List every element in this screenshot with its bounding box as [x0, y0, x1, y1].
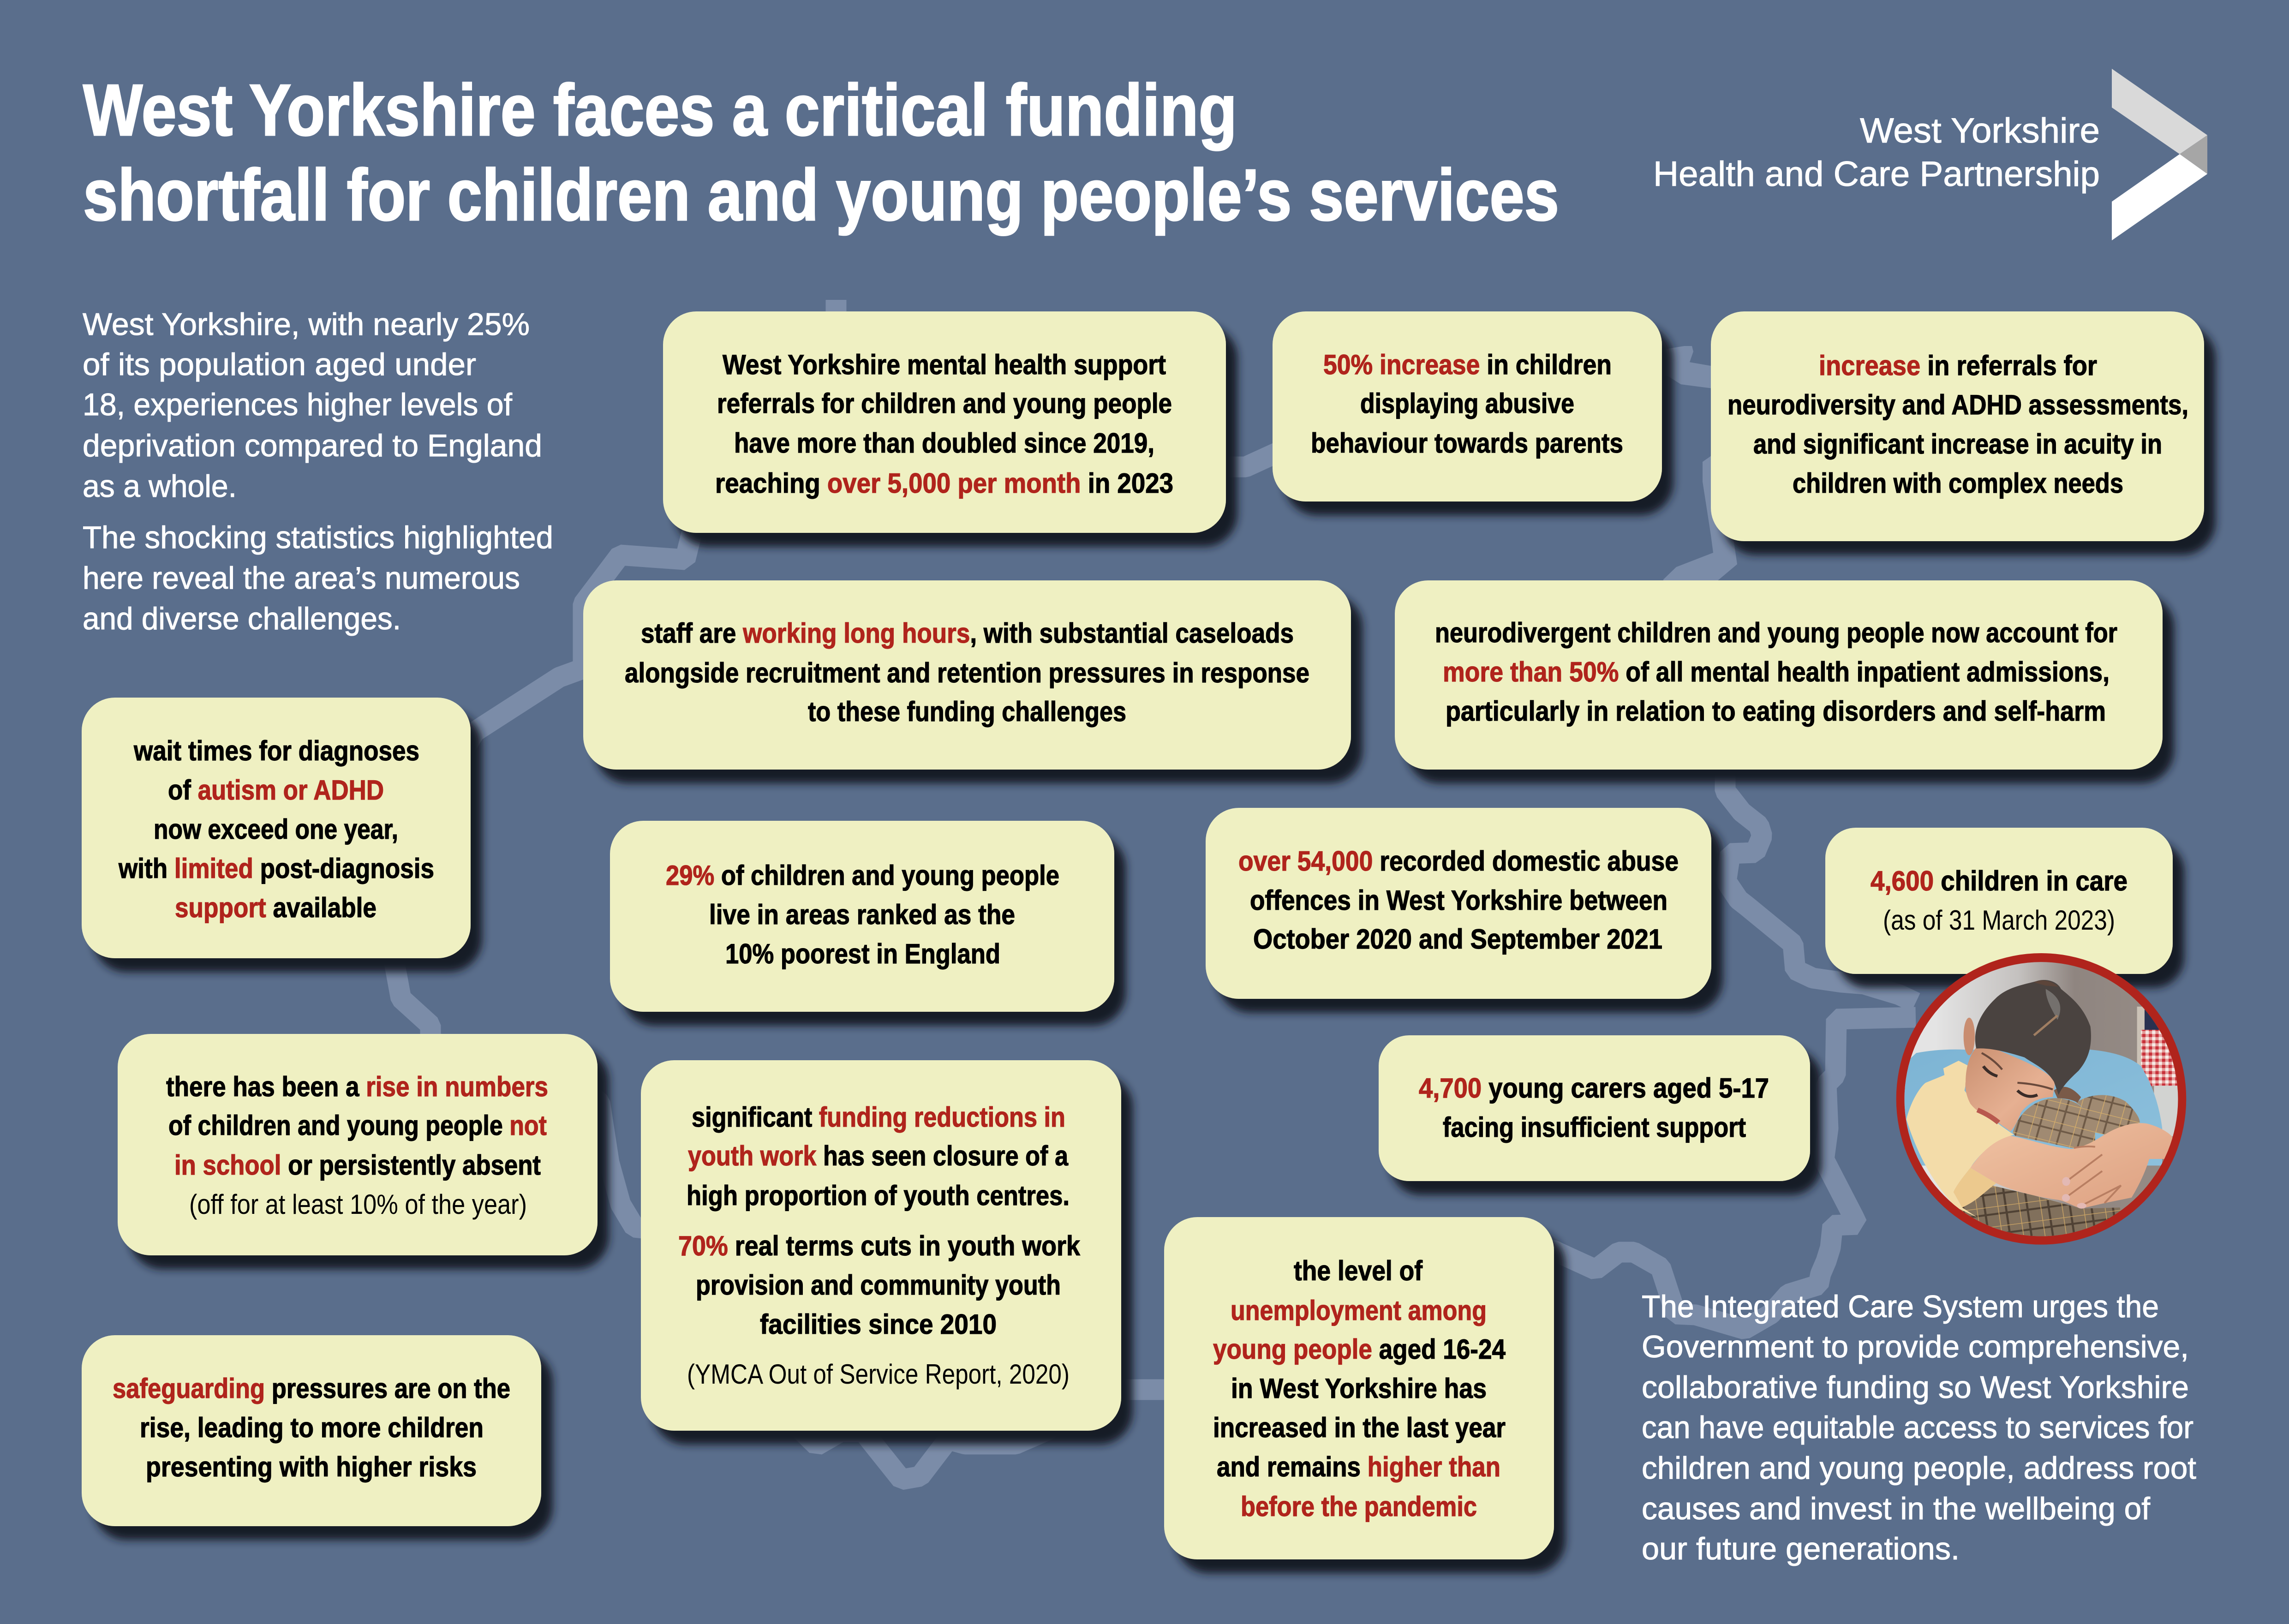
panel: safeguarding: safeguarding pressures are on the [113, 1373, 510, 1404]
panel: abusive behaviour: behaviour towards parents [1311, 428, 1623, 459]
logo: West Yorkshire Health and Care Partnership [1653, 69, 2207, 240]
panel: diagnosis wait times [82, 698, 471, 958]
map outline of West Yorkshire [394, 300, 1916, 1480]
panel: youth unemployment: increased in the last year [1213, 1412, 1506, 1443]
logo chevron [2112, 69, 2207, 240]
panel: safeguarding: rise, leading to more children [140, 1412, 484, 1443]
logo wordmark: West Yorkshire [1860, 111, 2100, 150]
panel: domestic abuse offences: offences in West Yorkshire between [1250, 885, 1667, 916]
closing call to action text: The Integrated Care System urges the [1642, 1289, 2159, 1324]
panel: youth work funding [641, 1060, 1121, 1431]
intro text: of its population aged under [83, 347, 476, 382]
panel: diagnosis wait times: now exceed one year, [154, 814, 398, 845]
title: West Yorkshire faces a critical funding [83, 70, 1237, 151]
panel: youth unemployment [1164, 1217, 1554, 1559]
panel: school absence [118, 1034, 598, 1255]
panel: school absence: of children and young people not [168, 1110, 547, 1141]
panel: neurodiversity referrals: increase in referrals for [1819, 350, 2097, 381]
closing call to action text [1642, 1289, 2196, 1566]
panel: abusive behaviour [1273, 311, 1662, 502]
intro text: deprivation compared to England [83, 428, 542, 463]
panel: abusive behaviour: 50% increase in children [1323, 349, 1612, 380]
panel: diagnosis wait times: of autism or ADHD [168, 775, 384, 806]
intro text: as a whole. [83, 469, 237, 504]
logo wordmark [1653, 111, 2100, 194]
panel: youth unemployment: unemployment among [1231, 1295, 1487, 1326]
logo wordmark: Health and Care Partnership [1653, 155, 2100, 194]
panel: youth work funding: facilities since 2010 [760, 1309, 997, 1340]
panel: domestic abuse offences [1206, 808, 1711, 999]
closing call to action text: Government to provide comprehensive, [1642, 1329, 2189, 1364]
panel: abusive behaviour: displaying abusive [1360, 388, 1574, 419]
panel: poorest areas: 10% poorest in England [725, 938, 1000, 969]
panel: youth unemployment: in West Yorkshire has [1231, 1373, 1487, 1404]
panel: youth work funding: significant funding reductions in [692, 1102, 1065, 1133]
panel: inpatient admissions: neurodivergent children and young people now account for [1435, 617, 2117, 648]
closing call to action text: can have equitable access to services for [1642, 1410, 2193, 1445]
photo: sad child hugging knees in red ring [1896, 953, 2186, 1245]
panel: diagnosis wait times: with limited post-diagnosis [118, 853, 434, 884]
red ring [1896, 953, 2186, 1245]
panel: poorest areas: 29% of children and young people [666, 860, 1059, 891]
intro text [83, 307, 553, 636]
intro text: The shocking statistics highlighted [83, 520, 553, 555]
panel: youth unemployment: before the pandemic [1241, 1491, 1477, 1522]
panel: staff pressures: to these funding challenges [808, 696, 1126, 727]
panel: school absence: (off for at least 10% of the year) [189, 1189, 527, 1220]
panel: mental health referrals: West Yorkshire mental health support [723, 349, 1166, 380]
panel: neurodiversity referrals [1711, 311, 2204, 541]
panel: children in care: 4,600 children in care [1871, 866, 2128, 896]
panel: mental health referrals: referrals for children and young people [717, 388, 1172, 419]
panel: domestic abuse offences: over 54,000 recorded domestic abuse [1238, 846, 1679, 877]
panel: mental health referrals [663, 311, 1226, 533]
closing call to action text: collaborative funding so West Yorkshire [1642, 1370, 2189, 1405]
panel: young carers: facing insufficient support [1443, 1112, 1746, 1143]
panel: young carers: 4,700 young carers aged 5-17 [1419, 1073, 1769, 1104]
panel: youth work funding: youth work has seen closure of a [688, 1140, 1069, 1171]
closing call to action text: our future generations. [1642, 1531, 1960, 1566]
panel: staff pressures [583, 580, 1351, 770]
title [83, 70, 1559, 236]
panel: neurodiversity referrals: neurodiversity and ADHD assessments, [1727, 389, 2188, 420]
closing call to action text: causes and invest in the wellbeing of [1642, 1491, 2150, 1526]
panel: young carers [1379, 1035, 1810, 1181]
panel: diagnosis wait times: wait times for diagnoses [133, 735, 419, 766]
panel: domestic abuse offences: October 2020 and September 2021 [1253, 924, 1662, 955]
intro text: and diverse challenges. [83, 601, 401, 636]
panel: youth work funding: (YMCA Out of Service Report, 2020) [687, 1359, 1070, 1390]
panel: youth work funding: high proportion of youth centres. [687, 1180, 1070, 1211]
panel: youth work funding: provision and community youth [696, 1270, 1061, 1301]
intro text: 18, experiences higher levels of [83, 387, 512, 422]
panel: mental health referrals: reaching over 5,000 per month in 2023 [715, 468, 1173, 499]
panel: youth unemployment: the level of [1294, 1255, 1423, 1286]
panel: inpatient admissions [1395, 580, 2163, 770]
panel: neurodiversity referrals: and significant increase in acuity in [1753, 429, 2162, 460]
title: shortfall for children and young people’s services [83, 155, 1559, 236]
panel: poorest areas [610, 821, 1114, 1012]
panel: staff pressures: alongside recruitment and retention pressures in response [625, 657, 1309, 688]
panel: staff pressures: staff are working long hours, with substantial caseloads [641, 618, 1294, 649]
panel: inpatient admissions: more than 50% of all mental health inpatient admissions, [1443, 657, 2110, 687]
panel: youth work funding: 70% real terms cuts in youth work [678, 1230, 1081, 1261]
intro text: West Yorkshire, with nearly 25% [83, 307, 530, 342]
panel: children in care [1825, 828, 2173, 974]
intro text: here reveal the area’s numerous [83, 561, 520, 596]
panel: youth unemployment: young people aged 16-24 [1213, 1334, 1506, 1365]
panel: neurodiversity referrals: children with complex needs [1793, 468, 2123, 499]
panel: diagnosis wait times: support available [175, 892, 377, 923]
panel: children in care: (as of 31 March 2023) [1883, 905, 2115, 936]
panel: safeguarding [82, 1335, 541, 1526]
panel: school absence: there has been a rise in numbers [166, 1071, 548, 1102]
closing call to action text: children and young people, address root [1642, 1451, 2196, 1486]
panel: mental health referrals: have more than doubled since 2019, [734, 428, 1154, 459]
panel: inpatient admissions: particularly in relation to eating disorders and self-harm [1446, 696, 2106, 727]
panel: poorest areas: live in areas ranked as the [709, 899, 1015, 930]
panel: youth unemployment: and remains higher than [1217, 1451, 1500, 1482]
panel: safeguarding: presenting with higher risks [146, 1451, 477, 1482]
panel: school absence: in school or persistently absent [174, 1150, 541, 1181]
